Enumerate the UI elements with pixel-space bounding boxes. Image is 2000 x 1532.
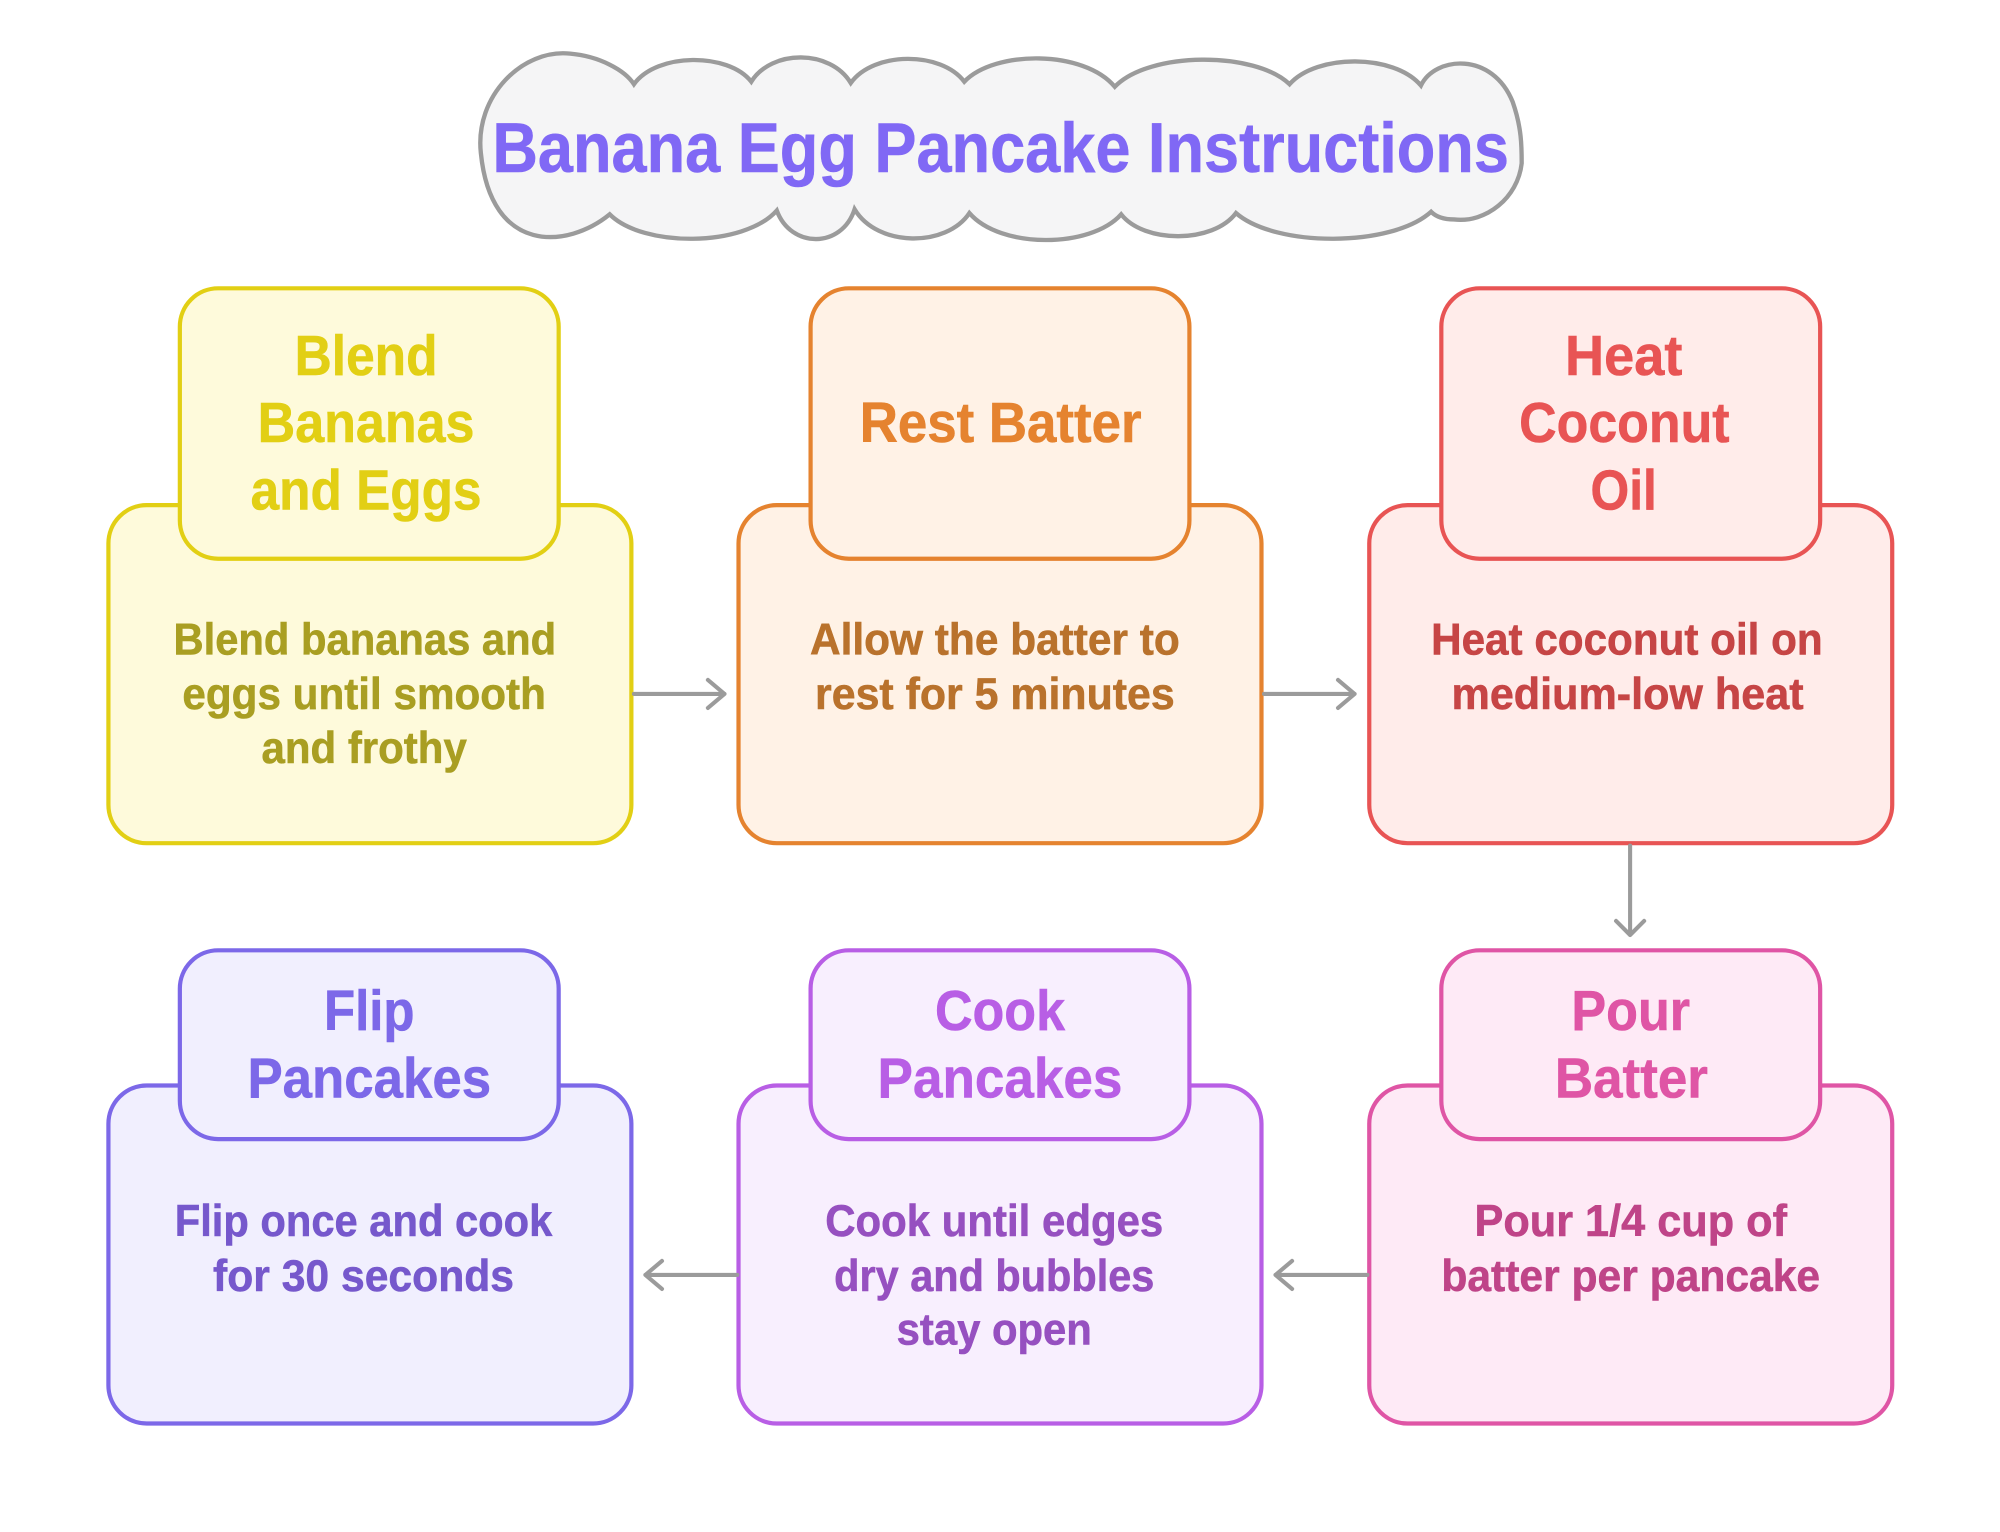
- heading: Pour: [1571, 979, 1690, 1042]
- heading: Cook: [935, 979, 1066, 1042]
- description: Flip once and cook: [175, 1197, 552, 1246]
- heading: Flip: [324, 979, 415, 1042]
- description: dry and bubbles: [834, 1252, 1154, 1301]
- panel: flip pancakes: [108, 950, 631, 1424]
- header box: [1441, 950, 1820, 1139]
- description: Allow the batter to: [810, 615, 1180, 664]
- description: Cook until edges: [825, 1197, 1163, 1246]
- description: medium-low heat: [1452, 670, 1804, 719]
- header box: [811, 950, 1189, 1139]
- description: rest for 5 minutes: [815, 670, 1175, 719]
- title text: Banana Egg Pancake Instructions: [492, 108, 1509, 187]
- heading: and Eggs: [251, 459, 482, 522]
- description: [175, 1197, 552, 1301]
- body box: [739, 505, 1261, 843]
- arrow: heat to pour: [1616, 846, 1644, 935]
- body box: [108, 505, 631, 843]
- heading: Blend: [295, 324, 437, 387]
- description: [810, 615, 1180, 719]
- heading: Heat: [1565, 324, 1682, 387]
- panel: heat coconut oil: [1369, 288, 1892, 843]
- heading: Oil: [1591, 459, 1657, 522]
- description: eggs until smooth: [182, 670, 546, 719]
- description: Blend bananas and: [173, 615, 556, 664]
- description: [825, 1197, 1163, 1354]
- heading: [878, 979, 1122, 1110]
- header box: [1441, 288, 1820, 559]
- description: [1441, 1197, 1820, 1301]
- body box: [1369, 505, 1892, 843]
- cloud shape: [480, 53, 1522, 240]
- heading: Batter: [1555, 1047, 1708, 1110]
- arrow: cook to flip: [645, 1261, 737, 1289]
- heading: Pancakes: [247, 1047, 491, 1110]
- arrow: blend to rest: [634, 680, 724, 708]
- header box: [180, 950, 559, 1139]
- header box: [811, 288, 1189, 559]
- panel: pour batter: [1369, 950, 1892, 1424]
- panel: rest batter: [739, 288, 1261, 843]
- heading: Rest Batter: [860, 391, 1142, 454]
- body box: [1369, 1086, 1892, 1424]
- description: Heat coconut oil on: [1431, 615, 1823, 664]
- description: and frothy: [261, 724, 467, 773]
- title cloud with heading: [480, 53, 1522, 240]
- heading: Bananas: [258, 391, 474, 454]
- heading: [1519, 324, 1730, 522]
- description: [1431, 615, 1823, 719]
- heading: Pancakes: [878, 1047, 1122, 1110]
- panel: blend bananas and eggs: [108, 288, 631, 843]
- arrow: rest to heat: [1264, 680, 1355, 708]
- heading: [247, 979, 491, 1110]
- description: for 30 seconds: [213, 1252, 514, 1301]
- body box: [108, 1086, 631, 1424]
- panel: cook pancakes: [739, 950, 1261, 1424]
- header box: [180, 288, 559, 559]
- description: batter per pancake: [1441, 1252, 1820, 1301]
- body box: [739, 1086, 1261, 1424]
- description: [173, 615, 556, 773]
- description: Pour 1/4 cup of: [1474, 1197, 1787, 1246]
- heading: [1555, 979, 1708, 1110]
- description: stay open: [897, 1305, 1092, 1354]
- arrow: pour to cook: [1276, 1261, 1367, 1289]
- heading: [251, 324, 482, 522]
- heading: Coconut: [1519, 391, 1730, 454]
